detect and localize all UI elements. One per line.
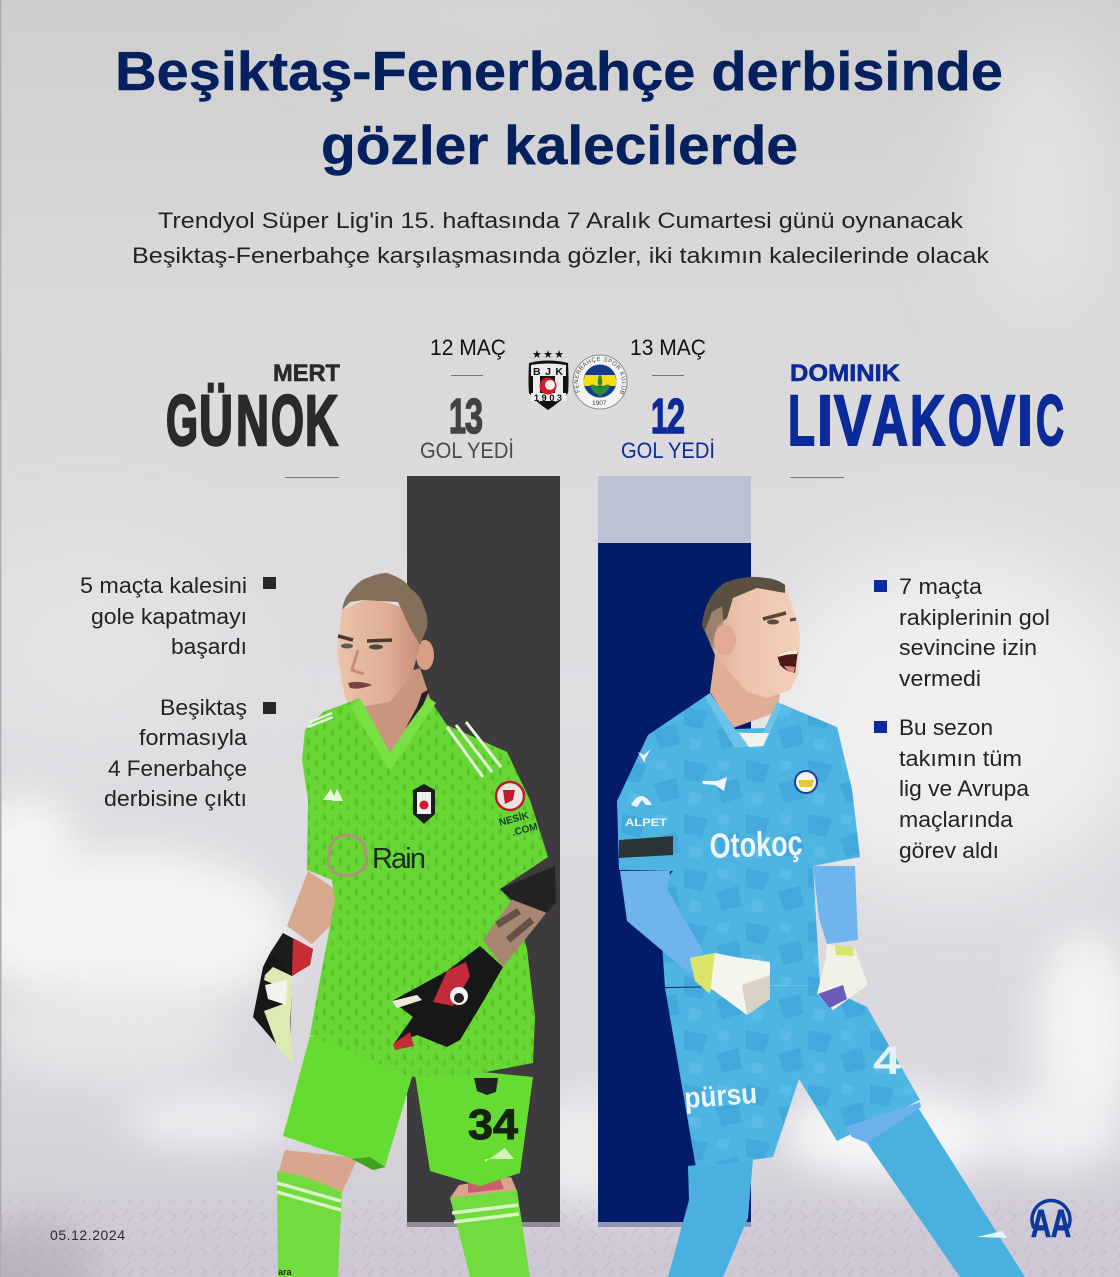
- text: Livakovic notes: 7 maçta: [899, 574, 982, 599]
- text: Günok notes: 5 maçta kalesini: [80, 573, 247, 598]
- text: Livakovic notes: maçlarında: [899, 807, 1013, 832]
- player: Mert Günok: NESİK: [497, 808, 531, 829]
- player: Mert Günok: [253, 573, 556, 1277]
- neck and head: [352, 668, 430, 758]
- arm band: [500, 866, 556, 913]
- text: Livakovic notes: takımın tüm: [899, 746, 1022, 771]
- name: Mert Günok: [166, 360, 340, 478]
- subtitle: [132, 208, 990, 268]
- left arm: [287, 871, 335, 944]
- stat: Beşiktaş goalkeeper: 12 MAÇ: [430, 335, 506, 360]
- name: Dominik Livakovic: DOMINIK: [790, 360, 901, 387]
- name: Mert Günok: O: [271, 382, 304, 461]
- name: Mert Günok: MERT: [273, 360, 340, 387]
- text: Günok notes: başardı: [171, 634, 247, 659]
- right sleeve arm: [813, 866, 858, 944]
- bar: Fenerbahçe goals conceded: [598, 476, 751, 1227]
- logo: Beşiktaş crest: [528, 349, 568, 410]
- subtitle: Beşiktaş-Fenerbahçe karşılaşmasında gözler, iki takımın kalecilerinde olacak: [132, 243, 990, 268]
- stat: Fenerbahçe goalkeeper: 1: [651, 390, 668, 444]
- head: [710, 645, 780, 728]
- text: Günok notes: gole kapatmayı: [91, 604, 247, 629]
- stat: Fenerbahçe goalkeeper: [621, 335, 715, 463]
- name: Mert Günok: K: [305, 382, 338, 461]
- player: Dominik Livakovic: 4: [873, 1039, 902, 1083]
- stat: Beşiktaş goalkeeper: 3: [465, 390, 483, 444]
- text: Günok notes: 4 Fenerbahçe: [108, 756, 247, 781]
- stat: Fenerbahçe goalkeeper: 2: [667, 390, 685, 444]
- text: Livakovic notes: vermedi: [899, 666, 981, 691]
- text: Günok notes: Beşiktaş: [160, 695, 247, 720]
- text: Livakovic notes: görev aldı: [899, 838, 999, 863]
- jersey: [617, 693, 860, 987]
- right glove: [817, 944, 868, 1010]
- left glove: [253, 953, 292, 1060]
- stat: Beşiktaş goalkeeper: 1: [449, 390, 466, 444]
- name: Dominik Livakovic: I: [817, 382, 833, 461]
- name: Mert Günok: N: [236, 382, 269, 461]
- logo: Anadolu Agency: AA: [1031, 1203, 1071, 1246]
- player: Mert Günok: Rain: [372, 843, 426, 875]
- name: Dominik Livakovic: I: [1017, 382, 1033, 461]
- name: Mert Günok: Ü: [199, 382, 233, 461]
- shorts: [283, 1036, 533, 1186]
- text: Günok notes: derbisine çıktı: [104, 786, 247, 811]
- stat: Beşiktaş goalkeeper: [420, 335, 514, 463]
- name: Dominik Livakovic: L: [788, 382, 815, 461]
- date: 05.12.2024: [50, 1227, 125, 1243]
- name: Mert Günok: G: [166, 382, 198, 461]
- jersey: [302, 697, 548, 1077]
- name: Dominik Livakovic: A: [872, 382, 908, 461]
- name: Dominik Livakovic: [788, 360, 1064, 478]
- logo: Beşiktaş crest: BJK: [533, 366, 563, 378]
- name: Dominik Livakovic: O: [948, 382, 982, 461]
- title: gözler kalecilerde: [321, 114, 798, 176]
- logo: Fenerbahçe crest: FENERBAHÇE SPOR KULÜBÜ: [574, 356, 626, 394]
- text: Livakovic notes: lig ve Avrupa: [899, 776, 1029, 801]
- text: Livakovic notes: sevincine izin: [899, 635, 1037, 660]
- left sock: [668, 1159, 753, 1277]
- player: Mert Günok: 34: [468, 1101, 518, 1149]
- name: Dominik Livakovic: V: [834, 382, 871, 461]
- right sock: [867, 1106, 1025, 1277]
- right glove: [392, 946, 503, 1047]
- logo: Fenerbahçe crest: [572, 354, 628, 410]
- subtitle: Trendyol Süper Lig'in 15. haftasında 7 Aralık Cumartesi günü oynanacak: [158, 208, 964, 233]
- shorts: [665, 985, 920, 1168]
- logo: Anadolu Agency: [1031, 1201, 1071, 1246]
- name: Dominik Livakovic: C: [1036, 382, 1064, 461]
- text: Livakovic notes: [874, 574, 1050, 863]
- left sleeve arm: [620, 871, 703, 974]
- text: Günok notes: [80, 573, 276, 811]
- logo: Beşiktaş crest: 1903: [534, 393, 562, 403]
- stat: Fenerbahçe goalkeeper: GOL YEDİ: [621, 438, 715, 463]
- player: Dominik Livakovic: ALPET: [625, 817, 667, 829]
- player: Dominik Livakovic: pürsu: [683, 1078, 758, 1115]
- bar: Beşiktaş goals conceded: [407, 476, 560, 1227]
- text: Günok notes: formasıyla: [139, 725, 248, 750]
- logo: Beşiktaş crest: ★★★: [532, 349, 564, 361]
- stat: Beşiktaş goalkeeper: GOL YEDİ: [420, 438, 514, 463]
- legs: [278, 1150, 517, 1198]
- player: Mert Günok: .COM: [511, 822, 539, 839]
- player: Dominik Livakovic: [617, 577, 1025, 1277]
- player: Mert Günok: ara: [278, 1267, 293, 1277]
- logo: Fenerbahçe crest: 1907: [592, 400, 607, 407]
- forearm: [483, 898, 547, 967]
- title: Beşiktaş-Fenerbahçe derbisinde: [115, 40, 1003, 102]
- name: Dominik Livakovic: V: [981, 382, 1015, 461]
- title: [115, 40, 1003, 176]
- left glove: [690, 953, 770, 1015]
- text: Livakovic notes: rakiplerinin gol: [899, 605, 1050, 630]
- stat: Fenerbahçe goalkeeper: 13 MAÇ: [630, 335, 706, 360]
- text: Livakovic notes: Bu sezon: [899, 715, 993, 740]
- name: Dominik Livakovic: K: [910, 382, 945, 461]
- player: Dominik Livakovic: Otokoç: [709, 824, 803, 866]
